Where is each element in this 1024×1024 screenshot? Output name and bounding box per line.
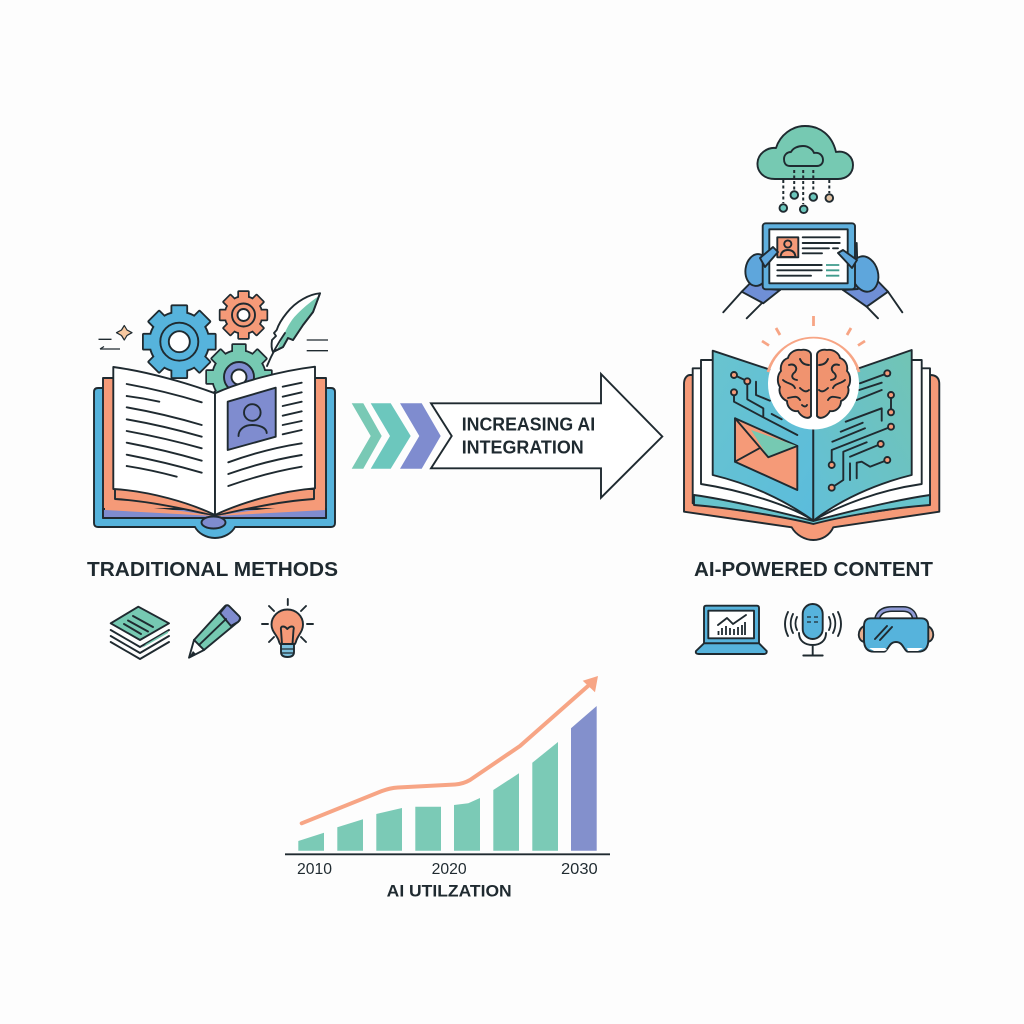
icon: green gear — [207, 345, 271, 409]
icon: orange gear — [220, 292, 266, 338]
icon: microphone — [785, 604, 841, 656]
gears behind the book — [144, 292, 271, 409]
bar chart: AI utilization — [285, 676, 610, 900]
axis — [285, 853, 610, 855]
heading: AI-powered content: AI-POWERED CONTENT — [694, 559, 933, 581]
sparkle and motion dashes — [98, 326, 328, 351]
axis labels: 2030 — [561, 861, 598, 878]
right page circuit traces — [829, 370, 894, 491]
axis labels: 2020 — [432, 861, 467, 878]
heading: traditional methods: TRADITIONAL METHODS — [87, 559, 338, 581]
traditional method icons — [111, 599, 313, 659]
brain emblem with glow — [762, 316, 865, 430]
icon: envelope — [735, 418, 797, 490]
tablet held by robot hands — [723, 223, 902, 318]
icon: pencil — [189, 605, 240, 658]
icon: brain right lobe — [817, 350, 850, 418]
traditional book illustration — [94, 292, 335, 538]
trend arrow — [302, 676, 598, 823]
icon: blue gear — [144, 306, 215, 377]
axis labels: 2010 — [297, 861, 332, 878]
portrait image on right page — [228, 388, 276, 450]
icon: light bulb — [262, 599, 313, 657]
icon: robot thumbs — [760, 247, 857, 268]
arrow: increasing AI integration — [431, 374, 662, 498]
open book pages — [113, 367, 315, 515]
icon: paper stack — [111, 607, 169, 659]
data drops — [780, 170, 833, 213]
AI-powered book illustration — [684, 316, 939, 540]
page stack — [693, 360, 930, 524]
right teal page — [813, 350, 912, 521]
icon: brain left lobe — [778, 350, 811, 418]
bars — [298, 706, 597, 851]
icon: cloud — [757, 126, 853, 179]
left page circuit traces — [731, 372, 797, 435]
icon: right robot hand — [843, 243, 902, 318]
arrow: increasing AI integration: INTEGRATION — [462, 437, 584, 457]
arrow: increasing AI integration: INCREASING AI — [462, 414, 595, 434]
book cover — [684, 375, 939, 540]
icon: feather quill — [267, 293, 320, 366]
icon: laptop with chart — [696, 606, 767, 654]
left teal page — [713, 351, 813, 521]
chart title: AI UTILZATION — [387, 882, 512, 900]
right page text lines — [228, 383, 302, 486]
left page text lines — [127, 384, 202, 477]
axis labels — [297, 861, 598, 878]
AI content icons — [696, 604, 933, 656]
cloud data illustration — [757, 126, 853, 213]
icon: tablet — [763, 223, 855, 289]
icon: left robot hand — [723, 248, 780, 318]
chevrons leading into arrow — [352, 403, 441, 469]
book cover and page stack — [94, 378, 335, 538]
icon: VR headset — [859, 609, 933, 652]
